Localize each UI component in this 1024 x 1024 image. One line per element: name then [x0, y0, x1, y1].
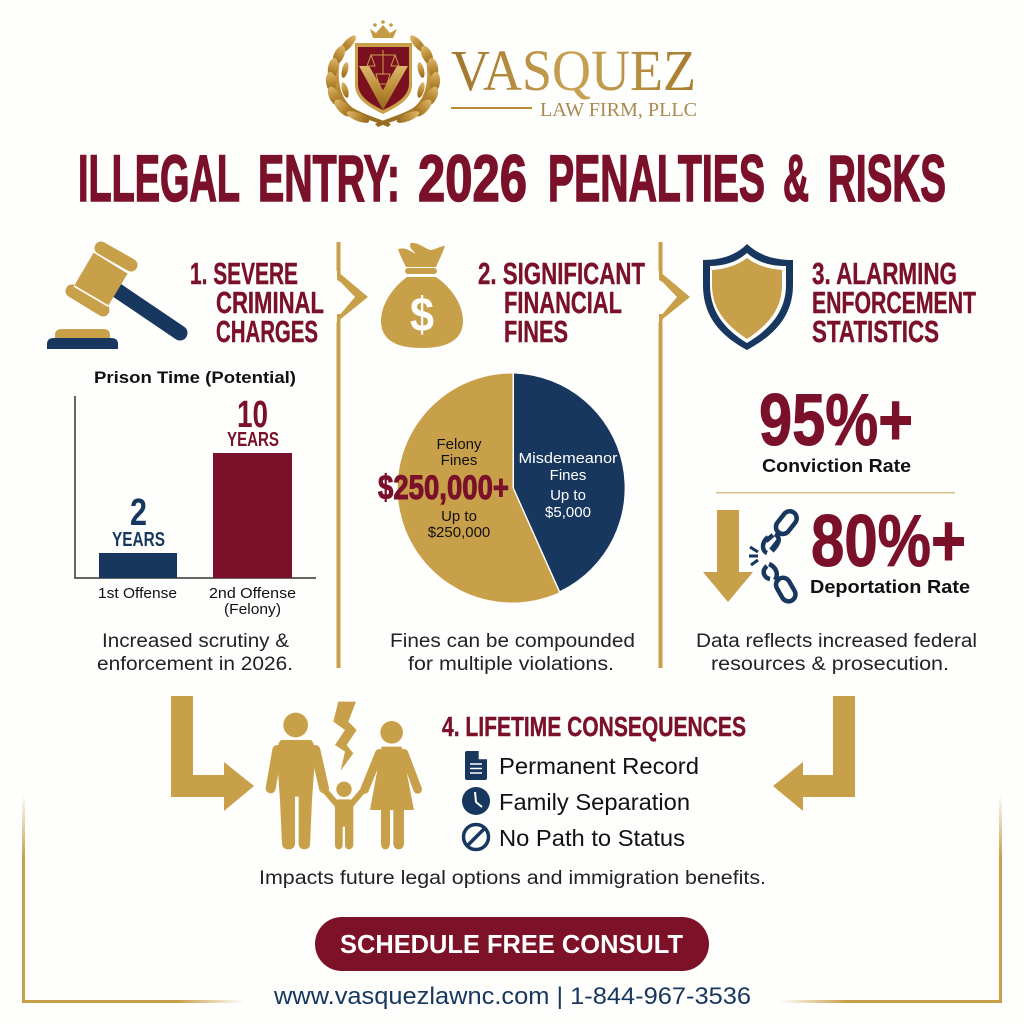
title: RISKS: [828, 141, 946, 215]
pie slice: misdemeanor fines: [514, 374, 625, 591]
icon: shield: [703, 244, 793, 350]
bar: 1st offense: [99, 553, 177, 578]
chart title: Prison Time (Potential): [94, 368, 296, 387]
arrow: right elbow: [773, 696, 855, 811]
misdemeanor label: Fines: [550, 467, 586, 484]
heading 2: 2. SIGNIFICANT: [478, 256, 645, 291]
value: 2 years: 2: [130, 492, 147, 534]
arrow: left elbow: [171, 696, 254, 811]
title: &: [783, 141, 809, 215]
heading 1: 1. SEVERE: [190, 256, 298, 291]
felony label: [436, 436, 482, 469]
caption 4: Impacts future legal options and immigration benefits.: [259, 868, 766, 889]
icon: down arrow: [703, 510, 753, 602]
value: 10 years: [227, 394, 279, 451]
caption 3: Data reflects increased federal: [696, 631, 977, 652]
panel: financial fines: [378, 243, 645, 675]
title: ILLEGAL: [78, 141, 240, 215]
caption 3: [696, 631, 977, 675]
icon: money bag: $: [410, 289, 434, 342]
value: 2 years: YEARS: [112, 529, 165, 551]
heading 2: [478, 256, 645, 349]
title: 2026: [418, 141, 527, 215]
heading 1: CHARGES: [216, 314, 318, 349]
frame: left and right gold border: [22, 795, 1002, 1003]
item: permanent record: Permanent Record: [499, 753, 699, 779]
icon: clock: [462, 787, 490, 815]
divider arrow 1: [336, 242, 368, 668]
bar: 2nd offense: [213, 453, 292, 578]
value: 10 years: 10: [237, 394, 268, 436]
value: 2 years: [112, 492, 165, 551]
felony label: Fines: [441, 452, 477, 469]
caption 2: for multiple violations.: [408, 654, 614, 675]
icon: shield with V: [355, 43, 412, 114]
icon: gavel: [47, 248, 180, 349]
icon: document: [465, 751, 487, 780]
caption 3: resources & prosecution.: [711, 654, 949, 675]
heading 3: STATISTICS: [812, 314, 939, 349]
panel: enforcement statistics: [696, 244, 977, 675]
heading 1: [190, 256, 324, 349]
felony range: $250,000: [428, 524, 490, 541]
stat: conviction rate: Conviction Rate: [762, 456, 911, 476]
heading 2: FINANCIAL: [504, 285, 622, 320]
logo rule: [451, 107, 532, 109]
item: no path to status: No Path to Status: [499, 825, 685, 851]
caption 1: Increased scrutiny &: [102, 631, 289, 652]
bar chart: prison time: [75, 394, 316, 618]
misdemeanor label: Misdemeanor: [518, 450, 618, 467]
logo wordmark: VASQUEZ: [451, 38, 696, 103]
caption 1: enforcement in 2026.: [97, 654, 293, 675]
pie slice: felony fines: [398, 373, 559, 602]
icon: prohibited: [464, 824, 488, 850]
heading 1: CRIMINAL: [216, 285, 324, 320]
icon: family with lightning bolt: [271, 702, 418, 849]
misdemeanor label: [518, 450, 618, 521]
caption 2: Fines can be compounded: [390, 631, 635, 652]
caption 2: [390, 631, 635, 675]
stat divider: [716, 492, 955, 494]
stat: conviction rate: 95%+: [759, 380, 913, 461]
stat: deportation rate: 80%+: [811, 501, 966, 582]
felony range: Up to: [441, 508, 477, 525]
icon: laurel wreath: [325, 33, 441, 127]
misdemeanor label: Up to: [550, 487, 586, 504]
pie chart: fines: [378, 373, 625, 602]
icon: broken chain: [749, 508, 800, 604]
misdemeanor label: $5,000: [545, 504, 591, 521]
caption 1: [97, 631, 293, 675]
divider arrow 2: [658, 242, 690, 668]
felony range: [428, 508, 490, 541]
value: 10 years: YEARS: [227, 429, 279, 451]
axis label 2: (Felony): [224, 601, 281, 618]
panel: criminal charges: [47, 248, 324, 675]
axis label 2: [209, 585, 296, 618]
title: [78, 141, 946, 215]
heading 3: [812, 256, 976, 349]
felony amount: $250,000+: [378, 469, 509, 507]
felony label: Felony: [436, 436, 482, 453]
title: PENALTIES: [548, 141, 765, 215]
title: ENTRY:: [258, 141, 400, 215]
heading 4: 4. LIFETIME CONSEQUENCES: [442, 711, 746, 742]
item: family separation: Family Separation: [499, 789, 690, 815]
heading 3: 3. ALARMING: [812, 256, 957, 291]
icon: crown: [370, 20, 397, 38]
heading 2: FINES: [504, 314, 568, 349]
contact line: www.vasquezlawnc.com | 1-844-967-3536: [273, 983, 751, 1010]
axis label 1: 1st Offense: [98, 585, 177, 602]
panel: lifetime consequences: [259, 702, 766, 889]
icon: money bag: [381, 243, 463, 348]
logo subtitle: LAW FIRM, PLLC: [540, 99, 697, 121]
stat: deportation rate: Deportation Rate: [810, 577, 970, 597]
button: schedule free consult: SCHEDULE FREE CONSULT: [340, 929, 683, 959]
button: schedule free consult: [315, 917, 709, 971]
logo: Vasquez Law Firm: [325, 20, 697, 127]
axis label 2: 2nd Offense: [209, 585, 296, 602]
